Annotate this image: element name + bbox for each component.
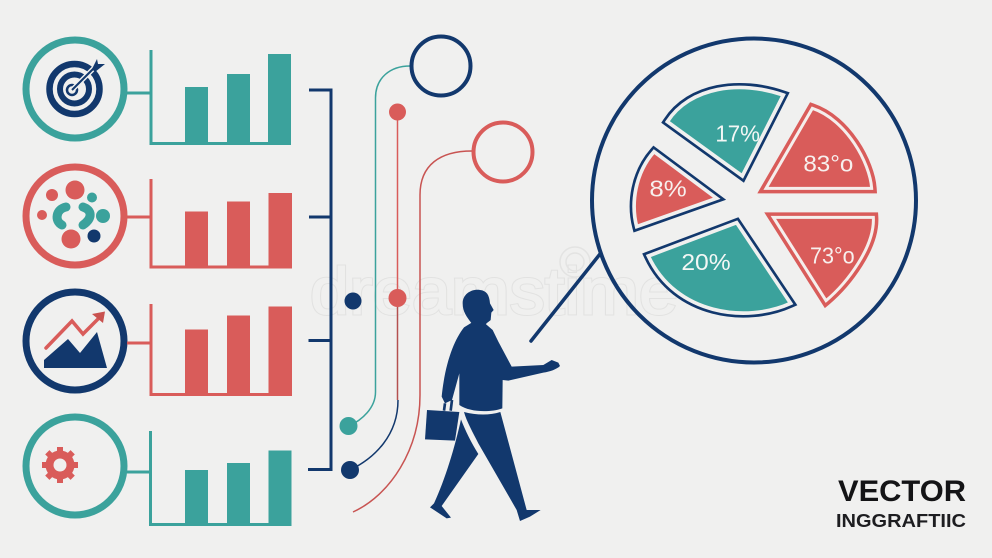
pie chart [634,87,873,313]
panel: cells metric row [26,167,292,268]
timeline: red and navy line [341,104,406,479]
icon: target [26,40,124,138]
bar chart: teal two [127,431,292,526]
icon: growth chart [26,292,124,390]
timeline: navy ring [412,36,470,96]
brand text: INGGRAFTIIC [836,511,966,531]
icon: gear [26,417,124,515]
bracket connector [308,90,331,470]
slice: 73 percent: 73°o [810,242,855,268]
watermark: dreamstime [310,254,678,328]
slice: 8 percent [634,152,717,227]
slice: 20 percent [648,223,791,313]
brand text: VECTOR [838,475,966,508]
slice: 8 percent: 8% [649,176,687,202]
slice: 17 percent: 17% [715,120,760,146]
slice: 83 percent: 83°o [803,150,853,176]
panel: growth metric row [26,292,292,396]
watermark: dreamstime [310,254,678,328]
timeline: teal line [340,66,410,435]
timeline: navy dot [344,292,362,310]
slice: 20 percent: 20% [681,249,731,275]
slice: 17 percent [667,87,783,176]
slice: 73 percent [773,217,873,301]
figure: walking businessman [425,290,560,521]
icon: cells [26,167,124,265]
panel: target metric row [26,40,291,145]
bar chart: teal one [127,50,291,145]
pointer line [531,254,600,341]
panel: settings metric row [26,417,292,526]
bar chart: red two [127,304,292,396]
timeline: red line [353,151,472,512]
bar chart: red one [127,179,292,268]
brand text [836,475,966,531]
timeline: red ring [474,122,532,182]
pie callout circle [592,38,916,362]
slice: 83 percent [766,108,872,188]
